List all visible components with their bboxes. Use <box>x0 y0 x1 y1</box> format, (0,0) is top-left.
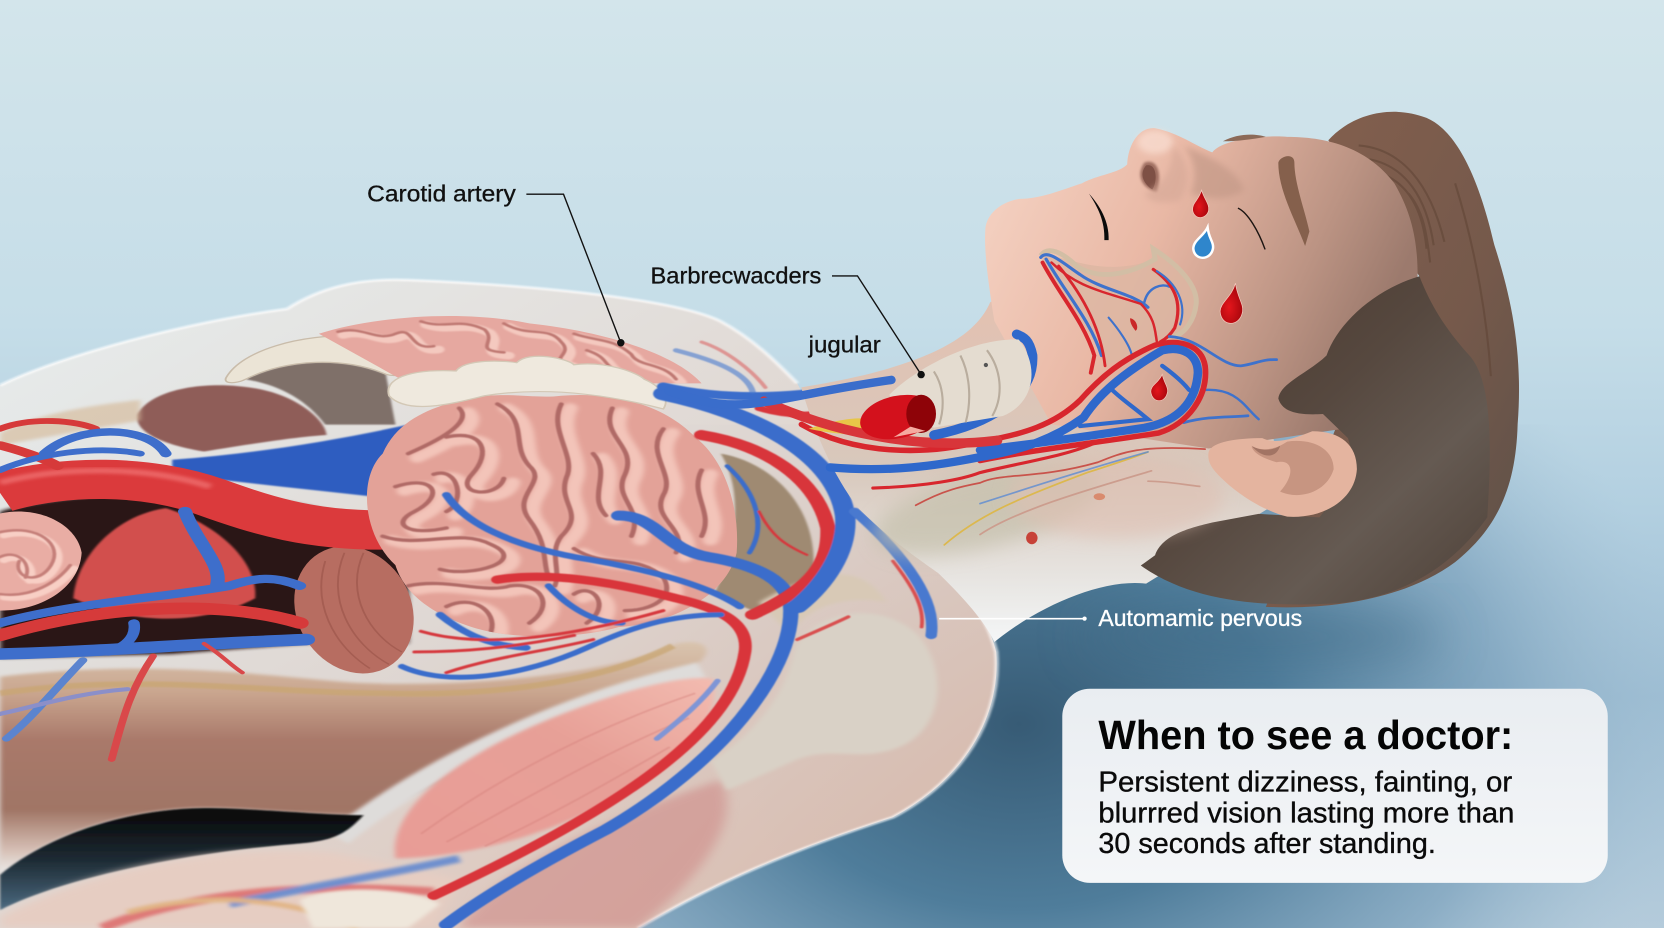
big brain <box>367 395 737 636</box>
forearm vessels <box>102 859 459 928</box>
pale body rim <box>0 280 997 928</box>
big artery <box>0 479 383 530</box>
liver <box>137 385 327 452</box>
label: autonomic nervous: Automamic pervous <box>1098 605 1302 631</box>
small vessel mark <box>1130 318 1137 331</box>
nose shadow <box>1140 162 1159 192</box>
neck grey shading <box>865 445 1109 574</box>
cream band <box>226 336 411 383</box>
callout body: Persistent dizziness, fainting, or <box>1098 767 1513 799</box>
large blue vein <box>172 425 408 499</box>
heart organ <box>73 508 255 619</box>
yellow fat near trachea <box>809 418 876 435</box>
inner ear <box>1252 441 1334 495</box>
label: jugular: jugular <box>808 331 881 357</box>
label: barbrecwacders: Barbrecwacders <box>651 262 821 288</box>
red valve <box>856 388 940 446</box>
great vessels to neck <box>663 342 932 640</box>
arm muscle <box>395 678 714 859</box>
face <box>985 128 1418 448</box>
closed eye <box>1238 208 1265 249</box>
nose highlight <box>1137 130 1173 154</box>
neck vessels below trachea <box>669 334 1033 443</box>
beige chest wall <box>714 454 814 611</box>
dark body cavity <box>0 493 408 658</box>
left vessel tangle <box>0 421 306 759</box>
throat gland fill <box>1041 249 1196 366</box>
forearm <box>0 851 459 928</box>
nostril <box>1142 165 1156 190</box>
gap below torso <box>0 808 364 910</box>
head <box>801 112 1519 607</box>
tan fibres upper left <box>0 400 140 445</box>
inner ear fold <box>1252 446 1280 456</box>
eyebrow <box>1278 156 1309 246</box>
shoulder bone <box>711 613 938 790</box>
red spot <box>1026 532 1038 544</box>
ear <box>1208 431 1357 517</box>
neck skin below ear <box>1009 455 1223 538</box>
pale arm edge <box>338 671 702 838</box>
small brain <box>0 512 82 611</box>
hair: top <box>1266 112 1519 607</box>
upper brain <box>319 316 702 383</box>
label: carotid artery <box>367 181 625 346</box>
throat vessels <box>801 255 1277 545</box>
dark side hair <box>1141 276 1490 604</box>
cheek shadow beside nose <box>1184 145 1244 198</box>
blood drop upper <box>1193 190 1209 218</box>
callout: when to see a doctor <box>1062 689 1608 883</box>
muscle fibres <box>421 693 695 846</box>
label: carotid artery: Carotid artery <box>367 181 516 207</box>
faded spot <box>1094 493 1105 500</box>
lower arm tissue <box>459 780 727 928</box>
callout body: 30 seconds after standing. <box>1098 828 1436 860</box>
lower torso band <box>0 642 706 875</box>
clavicle band <box>759 574 887 635</box>
forearm bone <box>300 889 440 928</box>
body: translucent torso and arm <box>0 280 997 928</box>
eyebrow tuft on top <box>1223 135 1266 141</box>
blood drop lower <box>1220 283 1243 323</box>
water drop <box>1193 227 1213 258</box>
label: barbrecwacders <box>651 262 925 378</box>
nose bridge <box>1144 145 1188 203</box>
neck <box>801 255 1284 642</box>
tan stripe <box>0 646 673 694</box>
blood drop in vessel <box>1151 374 1168 401</box>
trachea <box>889 339 1032 428</box>
callout heading: When to see a doctor: <box>1098 712 1513 758</box>
artery highlight <box>0 471 210 487</box>
hair: strands <box>1359 145 1491 376</box>
grey organ interior <box>246 362 395 425</box>
mouth <box>1089 194 1109 240</box>
muscle organ <box>282 541 426 679</box>
label: autonomic nervous <box>939 605 1302 631</box>
brain vessels <box>402 466 807 925</box>
bumpy white bone <box>388 356 666 409</box>
callout body: blurrred vision lasting more than <box>1098 797 1514 829</box>
callout body <box>1098 767 1514 860</box>
glass body envelope <box>0 280 997 928</box>
jaw bone outline <box>1041 249 1196 337</box>
